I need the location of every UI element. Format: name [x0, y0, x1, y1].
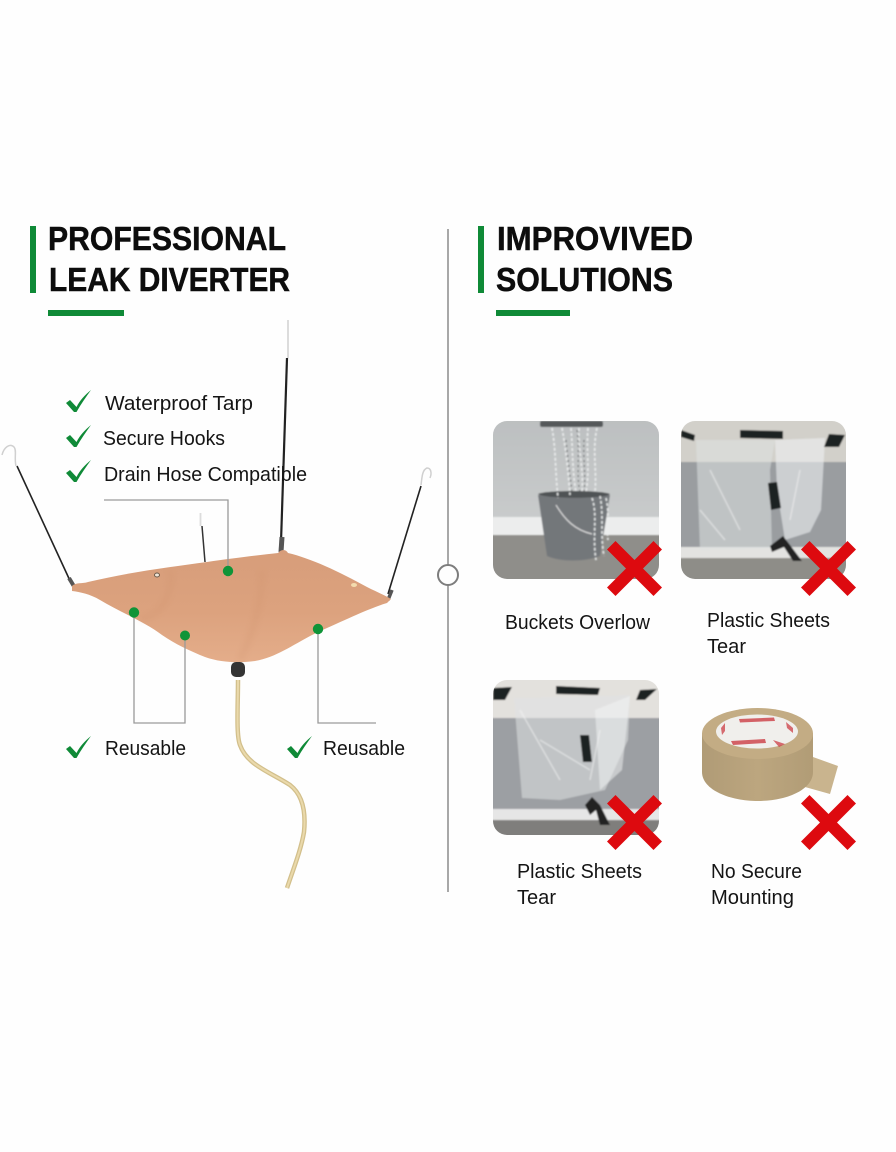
red x: plastic sheet 2: [607, 795, 662, 850]
hanging straps and hooks: [2, 320, 431, 594]
red x: plastic sheet 1: [801, 541, 856, 596]
caption: no secure mounting: No Secure: [711, 860, 802, 883]
label: secure hooks: Secure Hooks: [103, 427, 225, 450]
photo: packing tape roll: [702, 708, 838, 801]
caption: buckets overflow: Buckets Overlow: [505, 611, 650, 634]
check: waterproof tarp: [66, 390, 91, 412]
photo: plastic sheet taped up second: [490, 677, 662, 838]
caption: plastic sheets tear: Plastic Sheets: [707, 609, 830, 632]
feature list: [66, 390, 307, 486]
reusable callout left: Reusable: [105, 737, 186, 760]
caption: plastic sheets tear 2: Tear: [517, 886, 556, 909]
right heading: IMPROVIVED: [497, 220, 693, 257]
photo: plastic sheet taped up: [678, 418, 849, 582]
label: drain hose: Drain Hose Compatible: [104, 463, 307, 486]
reusable callout right: [287, 736, 405, 760]
reusable callout left: [66, 736, 186, 760]
red x: buckets: [607, 541, 662, 596]
red x: tape: [801, 795, 856, 850]
check: secure hooks: [66, 425, 91, 447]
photo: bucket overflowing: [490, 418, 662, 582]
right heading: SOLUTIONS: [496, 261, 673, 298]
caption: plastic sheets tear: [707, 609, 830, 658]
left heading: [30, 220, 290, 316]
hose: [238, 680, 305, 888]
grommets: [154, 573, 160, 577]
caption: no secure mounting: Mounting: [711, 886, 794, 909]
label: waterproof tarp: Waterproof Tarp: [105, 392, 253, 415]
caption: plastic sheets tear 2: Plastic Sheets: [517, 860, 642, 883]
reusable callout right: Reusable: [323, 737, 405, 760]
left heading: PROFESSIONAL: [48, 220, 286, 257]
drain fitting: [231, 662, 245, 677]
tarp sheet: [72, 550, 391, 662]
center divider with circle: [438, 229, 458, 892]
caption: no secure mounting: [711, 860, 802, 909]
left heading: LEAK DIVERTER: [49, 261, 290, 298]
caption: plastic sheets tear: Tear: [707, 635, 746, 658]
check: drain hose: [66, 460, 91, 482]
strap clips: [69, 578, 75, 588]
product: leak diverter tarp with hooks and hose: [2, 320, 431, 888]
right heading: [478, 220, 693, 316]
callout leader lines and dots: [104, 500, 376, 723]
caption: plastic sheets tear 2: [517, 860, 642, 909]
